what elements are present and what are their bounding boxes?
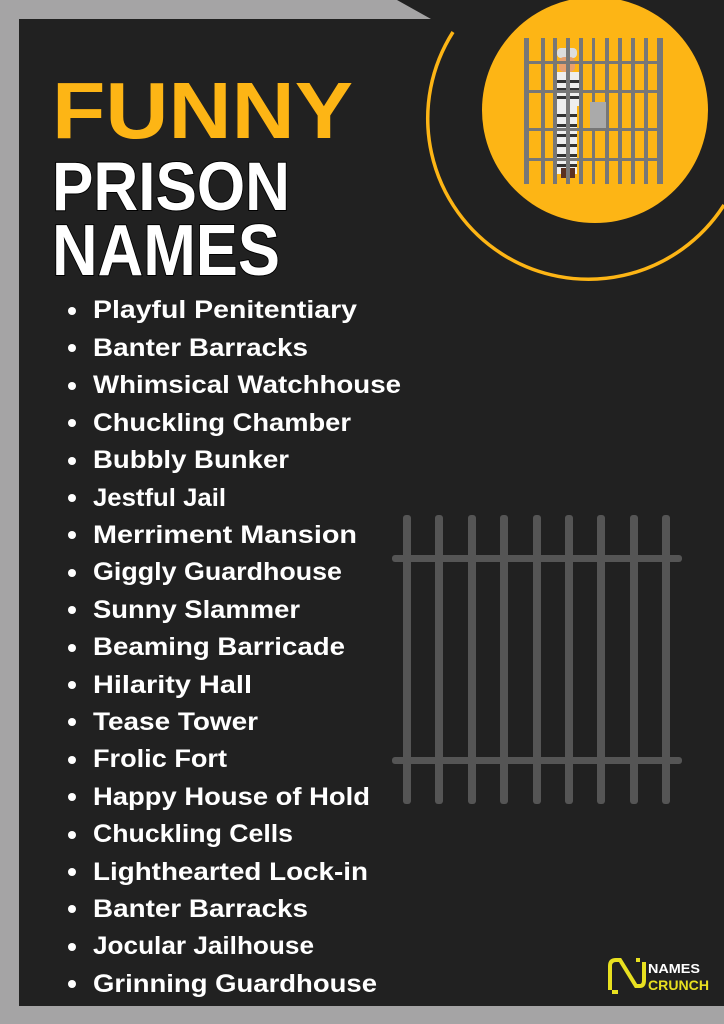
list of names: Hilarity Hall: [93, 671, 252, 699]
list of names: Chuckling Cells: [93, 820, 293, 848]
list of names: Giggly Guardhouse: [93, 558, 342, 586]
title: PRISON: [52, 148, 290, 225]
list of names: Whimsical Watchhouse: [93, 371, 401, 399]
list of names: Sunny Slammer: [93, 596, 300, 624]
list of names: Jestful Jail: [93, 484, 226, 512]
list of names: Chuckling Chamber: [93, 409, 351, 437]
list of names: Jocular Jailhouse: [93, 932, 314, 960]
list of names: Tease Tower: [93, 708, 258, 736]
list of names: Banter Barracks: [93, 895, 308, 923]
icon: large prison bars: [392, 515, 682, 804]
list of names: Lighthearted Lock-in: [93, 858, 368, 886]
list of names: Merriment Mansion: [93, 521, 357, 549]
list of names: Happy House of Hold: [93, 783, 370, 811]
logo: names crunch: NAMES: [648, 961, 700, 976]
cage bars: [524, 38, 663, 184]
list of names: Bubbly Bunker: [93, 446, 289, 474]
list of names: Banter Barracks: [93, 334, 308, 362]
list of names: Playful Penitentiary: [93, 296, 357, 324]
decorative arc: [428, 32, 724, 279]
title: NAMES: [52, 211, 280, 291]
list of names: [68, 296, 401, 998]
logo: names crunch: [610, 960, 709, 993]
list of names: Grinning Guardhouse: [93, 970, 377, 998]
prisoner: [555, 48, 579, 178]
title: [52, 66, 353, 291]
list of names: Beaming Barricade: [93, 633, 345, 661]
list of names: Frolic Fort: [93, 745, 228, 773]
logo: names crunch: CRUNCH: [648, 977, 709, 993]
icon: prisoner in cage: [482, 0, 708, 223]
title: FUNNY: [52, 66, 353, 155]
